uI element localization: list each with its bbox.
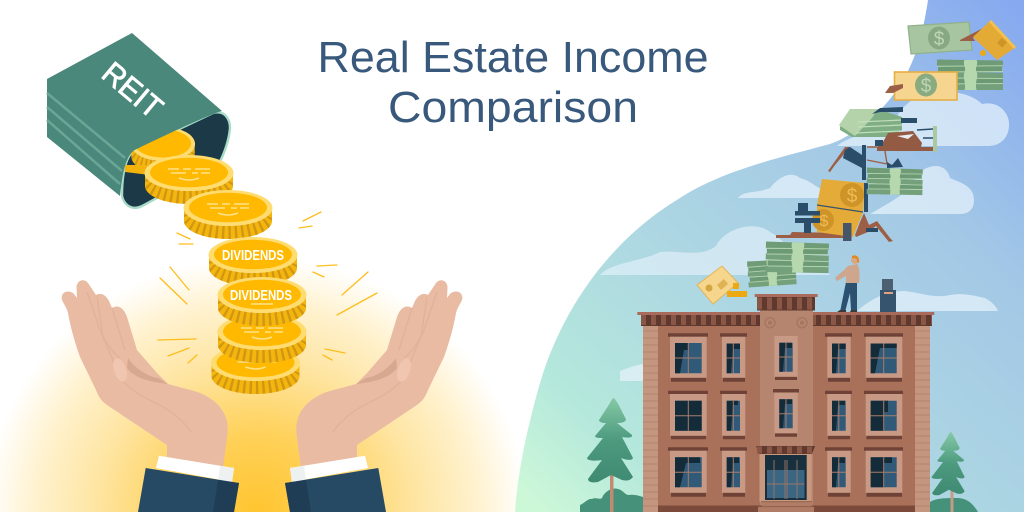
- green stack mid: [866, 168, 923, 195]
- thumb pad: [111, 357, 129, 383]
- dollar sign lower: $: [820, 213, 829, 230]
- bundle: [697, 266, 738, 304]
- box opening: [122, 112, 230, 208]
- dividends coin upper: [208, 237, 298, 286]
- door dark: [765, 455, 807, 500]
- roundel left: [765, 318, 775, 328]
- door glass: [767, 470, 804, 498]
- brown table: [877, 131, 933, 151]
- dollar circle lower: [812, 209, 834, 231]
- steps lines: [758, 502, 814, 507]
- quoins right: [915, 326, 930, 512]
- dentils: [641, 315, 932, 325]
- money stacks lower: [747, 241, 829, 287]
- parapet dentils: [757, 298, 815, 310]
- chair legs: [855, 213, 893, 242]
- tree left: [587, 398, 633, 512]
- wall: [643, 326, 930, 512]
- quoin lines: [643, 331, 930, 506]
- base band: [658, 506, 915, 512]
- brown plank: [776, 232, 843, 238]
- dark block: [875, 140, 883, 146]
- right hand: [285, 280, 462, 512]
- sky shape: [515, 0, 1024, 512]
- legs: [840, 282, 857, 312]
- dividends coin lower: [218, 277, 306, 326]
- awning ribs: [757, 446, 814, 454]
- dollar sign upper: $: [847, 186, 858, 207]
- steps: [758, 502, 814, 512]
- dark chair piece: [887, 158, 903, 168]
- coin 2: [144, 155, 234, 204]
- head: [851, 256, 859, 264]
- sleeve shade: [213, 480, 239, 512]
- gold box lower: [817, 205, 863, 237]
- shirt cuff: [156, 456, 234, 482]
- rooftop chimney box: [880, 279, 896, 312]
- window glass dark: [675, 343, 897, 487]
- parapet band: [757, 296, 815, 310]
- dark seat: [866, 228, 878, 232]
- tree right: [932, 432, 965, 512]
- brown shard: [885, 84, 903, 93]
- title line 2: Comparison: [388, 83, 638, 132]
- cloud: middle left: [738, 175, 838, 198]
- left hand: [62, 280, 239, 512]
- body: [880, 290, 896, 312]
- title: [318, 33, 708, 132]
- dividends coin upper: DIVIDENDS: [222, 247, 284, 264]
- stripe: [884, 292, 893, 294]
- chair rail: [867, 147, 887, 164]
- table highlight: [897, 134, 914, 139]
- window caps and sills: [668, 333, 903, 497]
- window glass light: [675, 343, 897, 487]
- iso stack: [839, 109, 902, 137]
- cloud: upper: [837, 91, 1009, 146]
- foliage: [932, 432, 965, 495]
- door frames: [767, 460, 804, 499]
- yellow bill: $: [921, 76, 932, 97]
- roundel right: [797, 318, 807, 328]
- seal: [706, 284, 712, 292]
- cuff shade: [218, 466, 234, 482]
- cornice dentil band: [641, 314, 932, 326]
- coin stack with dividends labels: [208, 237, 306, 394]
- quoins left: [643, 326, 658, 512]
- window frames: [670, 336, 902, 493]
- door surround: [760, 452, 812, 502]
- coin blank: [218, 314, 306, 363]
- upside chair seat: [843, 147, 862, 168]
- title line 1: Real Estate Income: [318, 33, 708, 82]
- finger creases: [87, 292, 191, 432]
- dark rods top: [872, 107, 917, 123]
- center bay: [760, 311, 813, 505]
- upside chair leg: [828, 147, 850, 172]
- cloud: rooftop: [857, 291, 998, 311]
- foliage: [587, 398, 633, 482]
- top: [882, 279, 893, 290]
- spark lines: [158, 212, 377, 363]
- box side and top: [47, 33, 222, 196]
- stack left: [747, 258, 797, 287]
- dark bench: [795, 203, 820, 233]
- parapet cap: [755, 294, 818, 297]
- flying furniture and bills: [776, 107, 937, 242]
- hand shape: [62, 280, 228, 468]
- upper money: [885, 20, 1016, 100]
- coin 3: [184, 190, 272, 239]
- green bill: $: [934, 29, 945, 50]
- clouds: [600, 91, 1009, 381]
- trunk: [950, 485, 954, 512]
- hair: [852, 255, 859, 263]
- dividends coin lower: DIVIDENDS: [230, 287, 292, 304]
- green post: [933, 126, 937, 152]
- palm shadow: [127, 358, 168, 384]
- bushes: [580, 489, 978, 512]
- center bay wall over cornice: [760, 310, 813, 340]
- box stripes: [47, 93, 125, 184]
- gold box upper: [817, 179, 865, 212]
- building: [637, 294, 934, 512]
- gold coins: [727, 283, 747, 297]
- box divider: [817, 205, 863, 212]
- person on roof: [835, 255, 860, 312]
- jacket sleeve: [138, 468, 239, 512]
- band: [717, 279, 728, 290]
- yellow money bundle near roof: [697, 266, 747, 304]
- stack right: [765, 241, 829, 273]
- shoes: [837, 310, 857, 312]
- bottom coin: [211, 345, 300, 394]
- REIT sleeve box: [47, 33, 230, 208]
- cloud: middle right: [870, 166, 974, 214]
- trunk: [610, 474, 614, 512]
- cloud: behind building left: [620, 364, 643, 381]
- gold box top right: [960, 20, 1016, 60]
- cornice top: [637, 312, 934, 315]
- coin inside box: [125, 127, 195, 175]
- yellow glow behind hands: [0, 255, 530, 512]
- dark post: [843, 223, 852, 241]
- stack top: [937, 59, 1003, 90]
- window muntins: [675, 343, 897, 487]
- cloud: low left: [600, 226, 830, 275]
- torso and arm: [835, 264, 860, 283]
- dark bars: [862, 145, 868, 212]
- REIT label: REIT: [95, 55, 170, 126]
- door awning: [756, 446, 815, 454]
- falling coins: [144, 155, 272, 239]
- dollar circle upper: [840, 183, 864, 207]
- table rods: [917, 129, 933, 138]
